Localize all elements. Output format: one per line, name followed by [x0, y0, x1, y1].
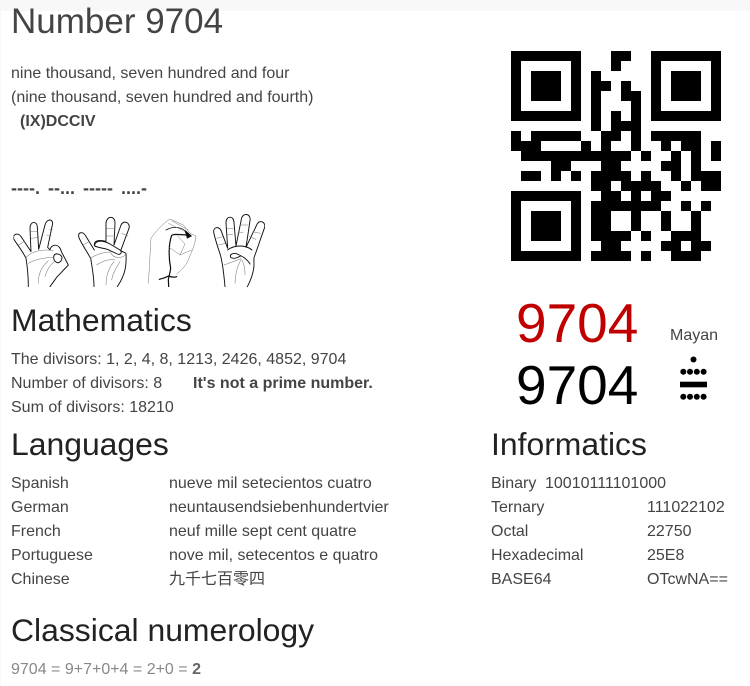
heading: Classical numerology: Classical numerology — [11, 612, 314, 648]
Mayan label: Mayan — [670, 327, 718, 344]
title: Number 9704 — [11, 2, 223, 41]
table: informatics: Ternary — [491, 499, 544, 516]
table: informatics — [491, 475, 728, 588]
table: informatics: 25E8 — [647, 547, 684, 564]
table: informatics: 10010111101000 — [545, 475, 666, 492]
table: informatics: Binary — [491, 475, 536, 492]
icon: Mayan numeral — [680, 356, 707, 400]
table: languages — [11, 475, 389, 588]
table: informatics: 22750 — [647, 523, 692, 540]
large red number: 9704 — [516, 292, 638, 354]
text block: divisors: Number of divisors: 8 — [11, 375, 162, 392]
table: languages: nueve mil setecientos cuatro — [169, 475, 372, 492]
table: languages: Spanish — [11, 475, 69, 492]
table: languages: Chinese — [11, 571, 70, 588]
table: languages: neuf mille sept cent quatre — [169, 523, 357, 540]
QR code — [511, 51, 721, 261]
table: languages: 九千七百零四 — [169, 571, 265, 588]
heading: Mathematics: Mathematics — [11, 302, 192, 338]
table: languages: Portuguese — [11, 547, 93, 564]
heading: Languages: Languages — [11, 426, 169, 462]
table: languages: nove mil, setecentos e quatro — [169, 547, 378, 564]
table: informatics: Octal — [491, 523, 528, 540]
table: informatics: Hexadecimal — [491, 547, 583, 564]
table: languages: German — [11, 499, 69, 516]
table: informatics: BASE64 — [491, 571, 551, 588]
table: informatics: 111022102 — [647, 499, 725, 516]
text block: number in words: (IX)DCCIV — [20, 113, 96, 130]
text block: divisors: The divisors: 1, 2, 4, 8, 1213, 2426, 4852, 9704 — [11, 351, 346, 368]
text block: divisors: Sum of divisors: 18210 — [11, 399, 174, 416]
table: languages: neuntausendsiebenhundertvier — [169, 499, 389, 516]
table: informatics: OTcwNA== — [647, 571, 728, 588]
table: languages: French — [11, 523, 61, 540]
text block: number in words: (nine thousand, seven hundred and fourth) — [11, 89, 313, 106]
icon: sign language hands — [14, 214, 265, 287]
large black number: 9704 — [516, 354, 638, 416]
text block: numerology sum: 9704 = 9+7+0+4 = 2+0 = 2 — [11, 661, 201, 678]
text block: divisors: It's not a prime number. — [193, 375, 373, 392]
text block: number in words: nine thousand, seven hundred and four — [11, 65, 289, 82]
text block: divisors — [11, 351, 373, 416]
morse code: ----. --... ----- ....- — [11, 178, 147, 198]
text block: number in words — [11, 65, 313, 130]
heading: Informatics: Informatics — [491, 426, 647, 462]
